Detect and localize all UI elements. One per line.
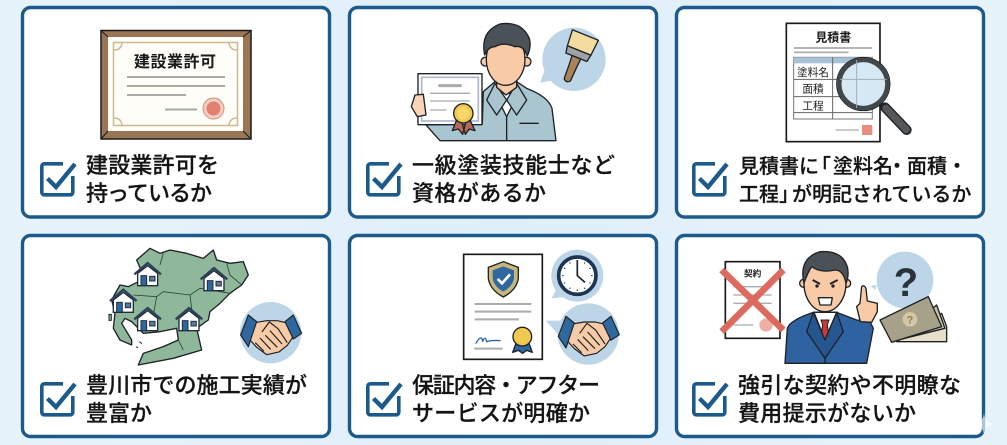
- label: [86, 153, 219, 206]
- icon: salesman, crossed contract, money: [722, 252, 947, 363]
- check icon: [368, 160, 406, 195]
- label: ・: [947, 156, 967, 178]
- panel: estimate: [676, 8, 984, 217]
- panel: construction permit: [22, 8, 330, 217]
- label: 費用提示がないか: [738, 401, 916, 426]
- label: 一級塗装技能士など: [412, 153, 615, 178]
- label: 豊富か: [86, 401, 152, 426]
- label: [412, 153, 615, 206]
- icon: salesman, crossed contract, money: ?: [894, 261, 918, 305]
- icon: map with houses: [109, 248, 302, 365]
- icon: estimate with magnifier: 工程: [802, 100, 824, 112]
- label: 保証内容・アフター: [412, 373, 600, 398]
- label: 資格があるか: [412, 181, 546, 206]
- label: [738, 373, 961, 426]
- label: 持っているか: [86, 181, 212, 206]
- icon: estimate with magnifier: [786, 23, 907, 142]
- icon: salesman, crossed contract, money: ?: [907, 314, 913, 326]
- panel: warranty: [350, 236, 656, 436]
- panel: qualification: [350, 8, 656, 217]
- check icon: [694, 380, 732, 415]
- panel: pushy contract: [676, 236, 984, 436]
- icon: salesman, crossed contract, money: 契約: [744, 268, 762, 279]
- label: 工程: [739, 183, 779, 206]
- icon: framed permit certificate: 建設業許可: [134, 52, 216, 71]
- icon: estimate with magnifier: 塗料名: [797, 66, 829, 79]
- check icon: [42, 380, 80, 415]
- label: が明記されているか: [792, 183, 971, 206]
- check icon: [368, 380, 406, 415]
- icon: warranty document, clock, handshake: [464, 250, 619, 365]
- icon: estimate with magnifier: 面積: [802, 83, 824, 96]
- label: 豊川市での施工実績が: [86, 373, 307, 398]
- label: 」: [779, 184, 799, 206]
- label: 見積書に: [739, 155, 819, 178]
- label: [412, 373, 600, 426]
- label: [739, 155, 971, 206]
- check icon: [694, 160, 732, 195]
- icon: framed permit certificate: [101, 30, 251, 139]
- icon: estimate with magnifier: 見積書: [815, 30, 851, 45]
- label: 建設業許可を: [86, 153, 219, 178]
- label: サービスが明確か: [412, 401, 590, 426]
- label: 「: [811, 155, 831, 178]
- panel: local track record: [22, 236, 330, 436]
- label: 強引な契約や不明瞭な: [738, 373, 961, 398]
- label: [86, 373, 307, 426]
- watermark sparkle: [973, 413, 995, 435]
- label: 塗料名: [833, 155, 893, 178]
- check icon: [42, 160, 80, 195]
- icon: painter with certificate: [411, 23, 606, 141]
- label: 面積: [907, 155, 947, 178]
- label: ・: [887, 156, 907, 178]
